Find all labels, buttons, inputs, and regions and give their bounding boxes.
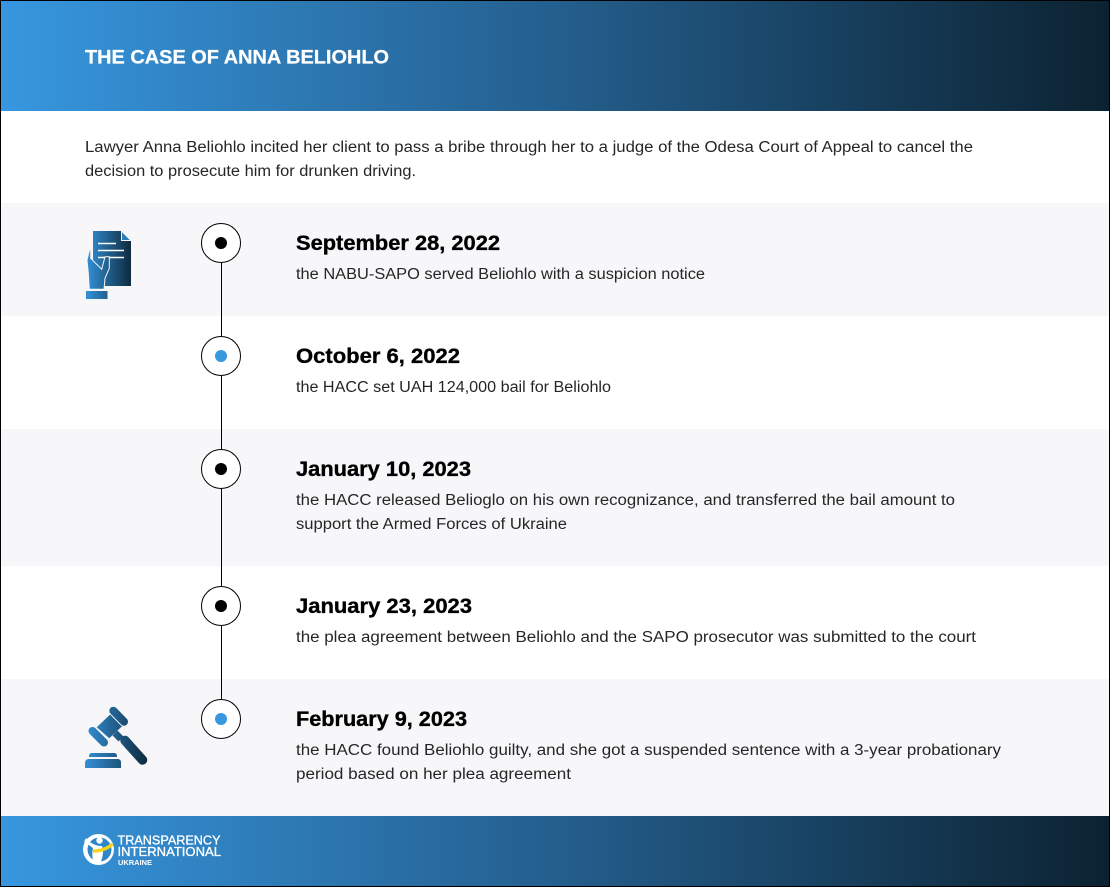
event: January 23, 2023: January 23, 2023	[296, 595, 472, 618]
intro text: decision to prosecute him for drunken driving.	[85, 163, 416, 180]
event: January 23, 2023: the plea agreement between Beliohlo and the SAPO prosecutor was submitted to the court	[296, 629, 977, 646]
event: January 10, 2023: support the Armed Forces of Ukraine	[296, 516, 567, 533]
icon: judge gavel	[85, 711, 142, 768]
event: September 28, 2022: the NABU-SAPO served Beliohlo with a suspicion notice	[296, 266, 705, 283]
intro text: Lawyer Anna Beliohlo incited her client to pass a bribe through her to a judge of the Odesa Court of Appeal to cancel the	[85, 139, 973, 156]
event: September 28, 2022	[202, 224, 705, 283]
event: October 6, 2022: October 6, 2022	[296, 345, 460, 368]
header banner	[1, 1, 1109, 111]
intro text	[85, 139, 973, 180]
timeline line	[220, 243, 222, 719]
event: February 9, 2023: the HACC found Beliohlo guilty, and she got a suspended sentence with a 3-year probationary	[296, 742, 1001, 759]
logo: Transparency International Ukraine: TRANSPARENCY	[118, 834, 221, 848]
event: January 23, 2023	[202, 586, 977, 646]
icon: hand holding document	[86, 231, 131, 299]
row backgrounds	[1, 203, 1109, 816]
footer banner	[1, 816, 1109, 886]
event: January 10, 2023	[202, 450, 955, 533]
logo: Transparency International Ukraine: UKRAINE	[118, 860, 152, 867]
event: February 9, 2023: period based on her plea agreement	[296, 766, 572, 783]
event: September 28, 2022: September 28, 2022	[296, 232, 500, 255]
logo: Transparency International Ukraine	[83, 834, 221, 867]
event: January 10, 2023: January 10, 2023	[296, 458, 471, 481]
event: February 9, 2023: February 9, 2023	[296, 708, 467, 731]
event: February 9, 2023	[202, 700, 1001, 783]
title: THE CASE OF ANNA BELIOHLO	[85, 46, 389, 68]
event: October 6, 2022: the HACC set UAH 124,000 bail for Beliohlo	[296, 379, 611, 396]
event: January 10, 2023: the HACC released Belioglo on his own recognizance, and transferred the bail amount to	[296, 492, 955, 509]
logo: Transparency International Ukraine: INTERNATIONAL	[118, 845, 221, 859]
event: October 6, 2022	[202, 336, 611, 396]
